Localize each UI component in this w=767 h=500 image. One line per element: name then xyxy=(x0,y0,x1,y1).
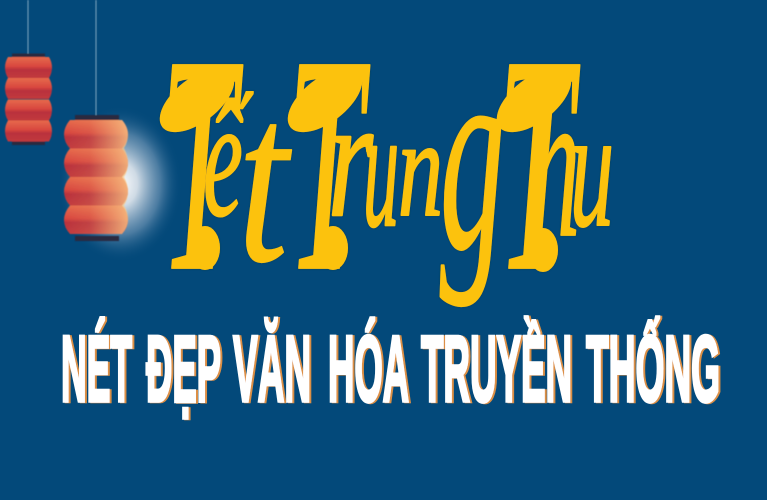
brush dabs on the capital letters xyxy=(149,56,582,272)
title: Tết Trung Thu: T xyxy=(497,0,581,335)
title: Tết Trung Thu: g xyxy=(440,0,505,307)
heading: Nét đẹp văn hóa truyền thống: VĂN xyxy=(233,316,311,421)
heading: Nét đẹp văn hóa truyền thống: ĐẸP xyxy=(146,316,221,421)
title: Tết Trung Thu: h xyxy=(530,46,580,281)
title: Tết Trung Thu: t xyxy=(238,46,292,312)
title: Tết Trung Thu: r xyxy=(328,65,373,252)
icon: large glowing lantern xyxy=(64,0,128,241)
title: Tết Trung Thu: u xyxy=(363,75,399,263)
title: Tết Trung Thu: T xyxy=(160,0,244,335)
title: Tết Trung Thu: T xyxy=(287,0,371,335)
title: Tết Trung Thu: u xyxy=(570,74,614,263)
heading: Nét đẹp văn hóa truyền thống: NÉT xyxy=(61,316,132,421)
heading: Nét đẹp văn hóa truyền thống xyxy=(61,316,720,421)
glow behind lantern xyxy=(58,106,182,262)
title: Tết Trung Thu: n xyxy=(398,91,443,246)
heading: Nét đẹp văn hóa truyền thống: HÓA xyxy=(328,316,409,421)
title: Tết Trung Thu: ế xyxy=(203,65,254,252)
title: Tết Trung Thu xyxy=(149,0,614,335)
icon: small lantern xyxy=(5,0,52,145)
